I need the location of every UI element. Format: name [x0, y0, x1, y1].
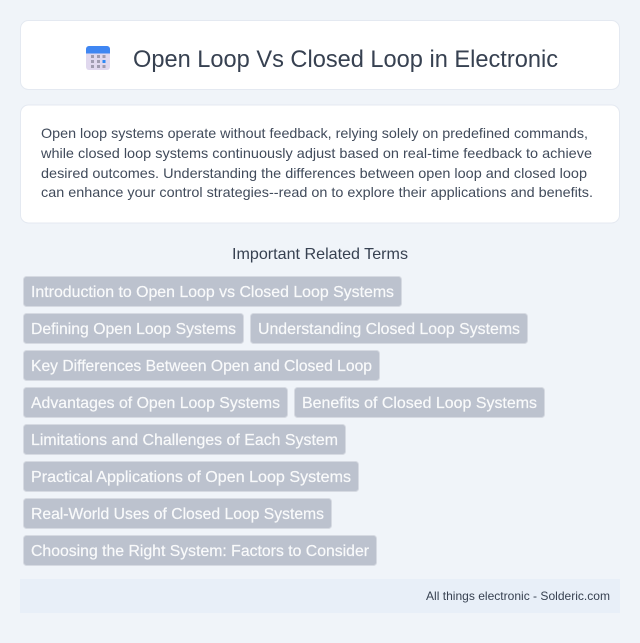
tag: defining open loop	[24, 314, 244, 344]
tag: real-world uses: Real-World Uses of Closed Loop Systems	[31, 506, 324, 523]
tag: real-world uses	[24, 498, 332, 528]
tag: practical applications: Practical Applications of Open Loop Systems	[31, 469, 351, 486]
tag: advantages: Advantages of Open Loop Systems	[31, 395, 280, 412]
text block: introduction	[40, 125, 593, 200]
tag: introduction: Introduction to Open Loop vs Closed Loop Systems	[31, 284, 394, 301]
text block: introduction: desired outcomes. Understanding the differences between open loop and closed loop	[41, 165, 587, 181]
tag: limitations	[24, 424, 346, 454]
tag: key differences: Key Differences Between Open and Closed Loop	[31, 358, 372, 375]
text block: introduction: can enhance your control strategies--read on to explore their applications and benefits.	[41, 184, 593, 200]
footer	[20, 579, 620, 613]
tag: benefits: Benefits of Closed Loop Systems	[302, 395, 537, 412]
tag: practical applications	[24, 462, 358, 492]
tag: key differences	[24, 350, 380, 380]
tag: benefits	[294, 388, 544, 418]
text block: introduction: while closed loop systems continuously adjust based on real-time feedback to achieve	[40, 145, 592, 161]
footer text: All things electronic - Solderic.com	[426, 589, 610, 603]
tag: limitations: Limitations and Challenges of Each System	[31, 432, 338, 449]
tag: understanding closed loop: Understanding Closed Loop Systems	[258, 321, 520, 338]
tag: choosing the right system	[24, 536, 376, 566]
title: Open Loop Vs Closed Loop in Electronic	[133, 46, 558, 73]
tag: advantages	[24, 388, 288, 418]
header panel	[20, 20, 620, 90]
tag list	[24, 276, 544, 566]
text block: introduction: Open loop systems operate without feedback, relying solely on predefined commands,	[41, 125, 588, 141]
heading: important related terms: Important Related Terms	[232, 246, 408, 263]
icon: calendar grid	[86, 46, 110, 70]
tag: defining open loop: Defining Open Loop Systems	[31, 321, 236, 338]
panel: introduction	[20, 105, 620, 223]
tag: understanding closed loop	[250, 314, 528, 344]
tag: introduction	[24, 276, 402, 306]
tag: choosing the right system: Choosing the Right System: Factors to Consider	[31, 543, 370, 560]
